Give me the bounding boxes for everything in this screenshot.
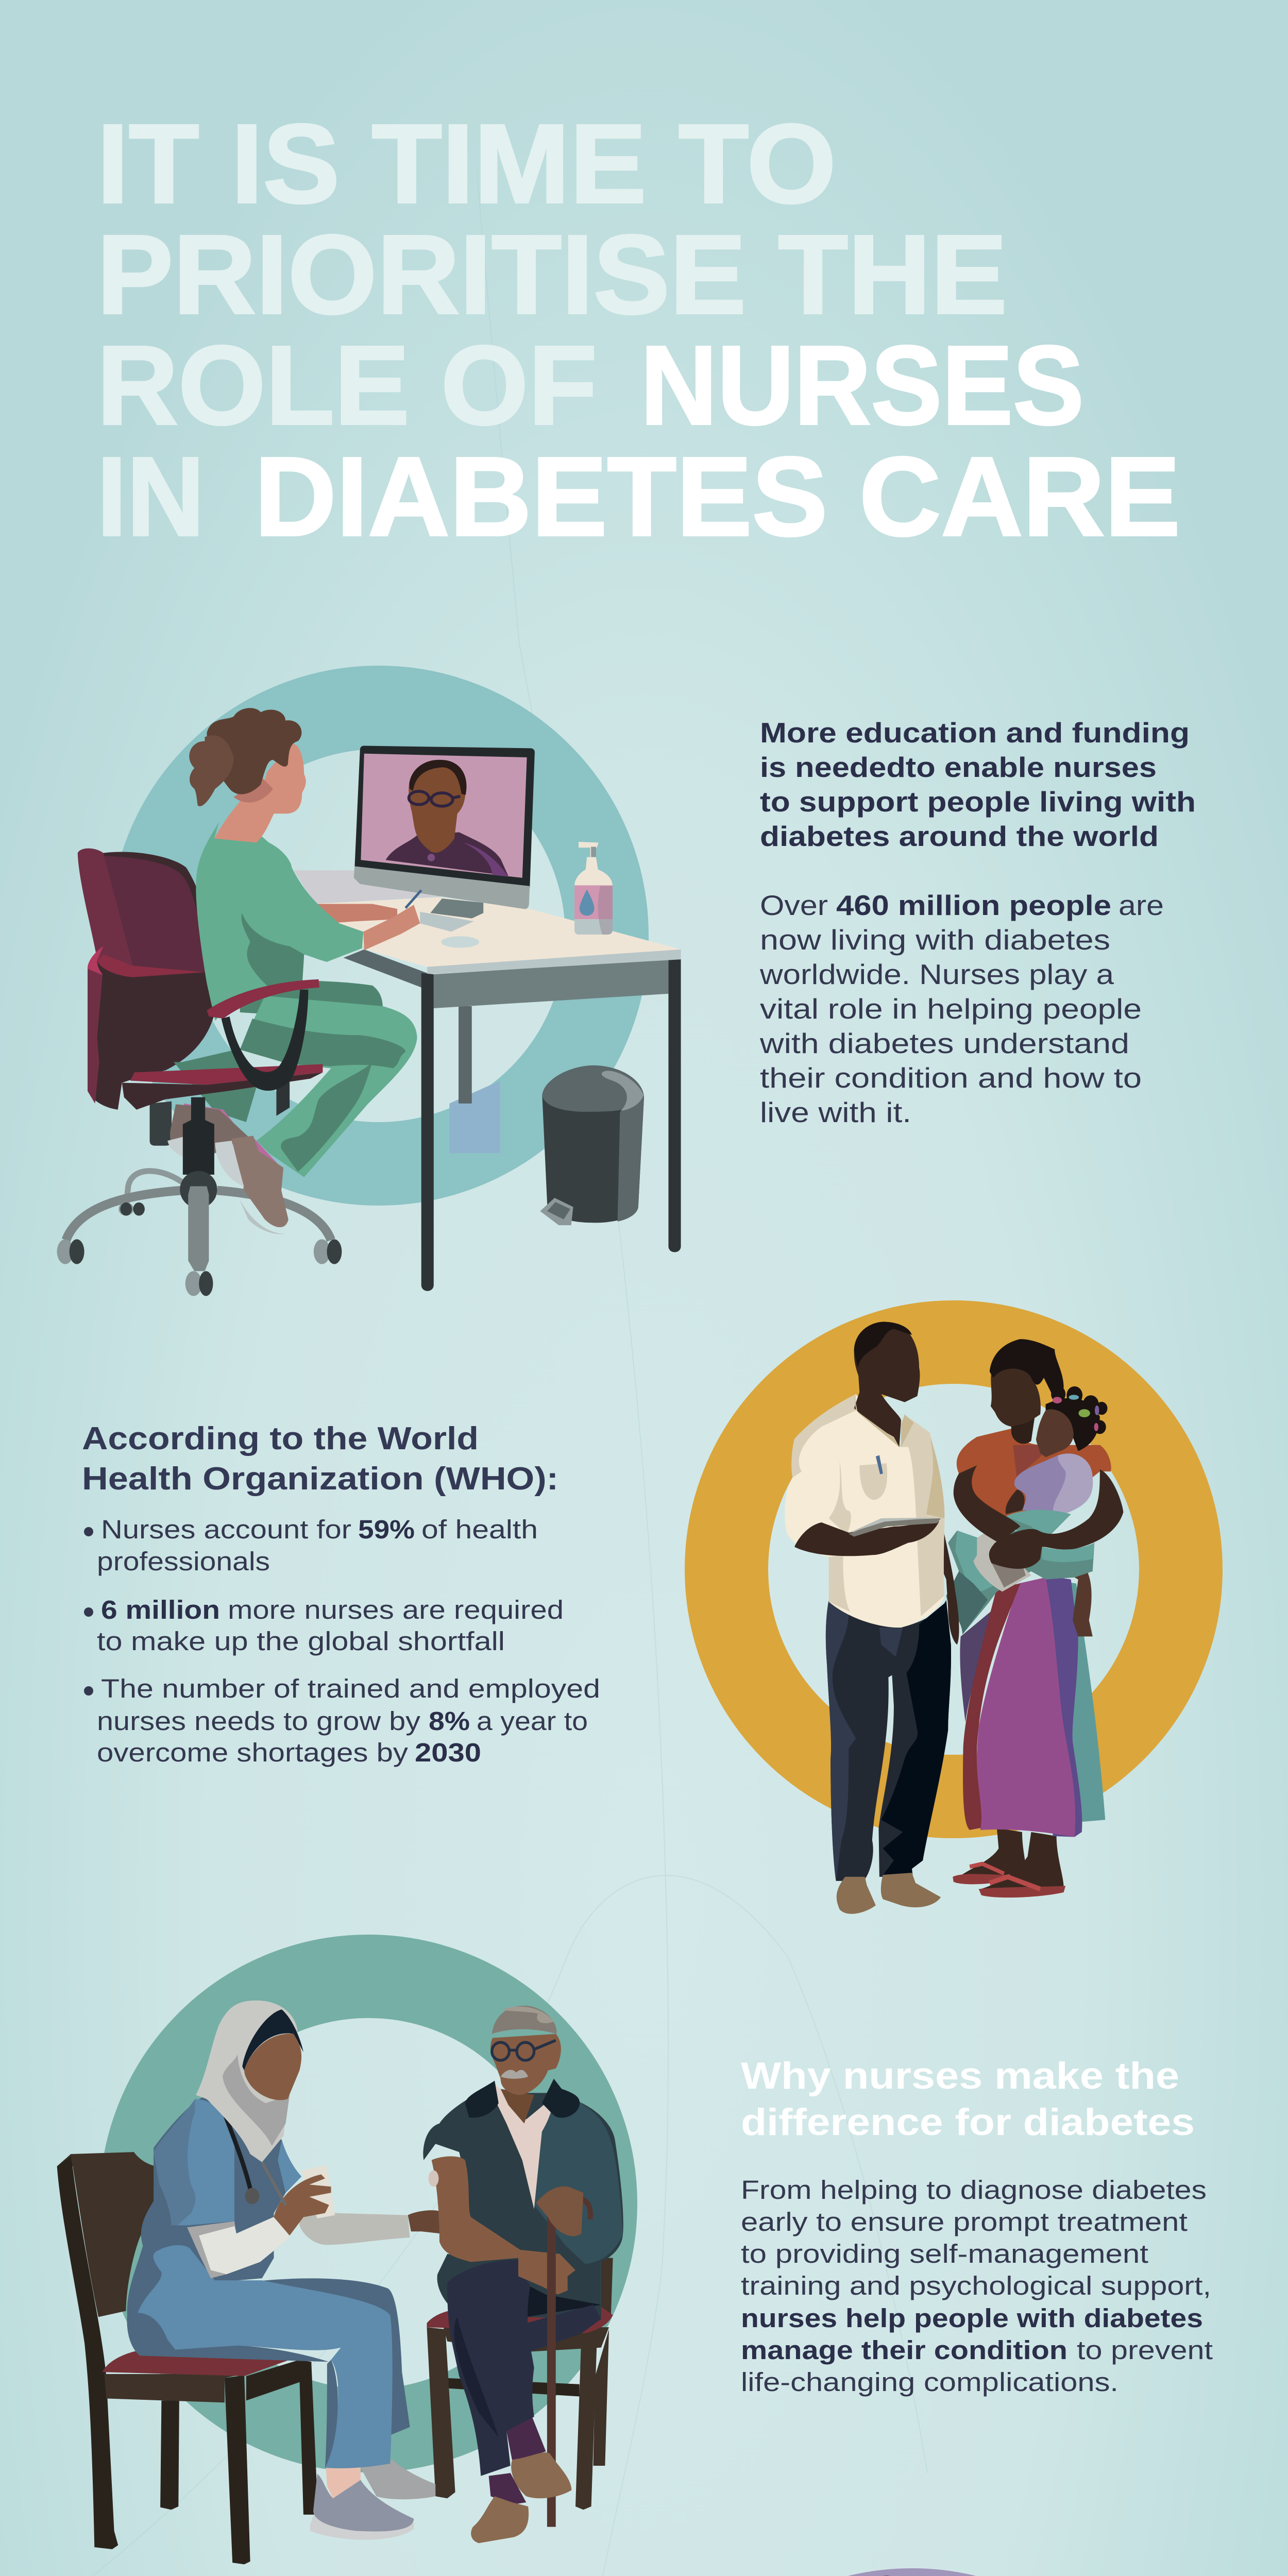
bullet list: professionals — [97, 1547, 270, 1576]
title: DIABETES CARE — [255, 434, 1180, 560]
heading — [760, 717, 1196, 852]
paragraph: their condition and how to — [760, 1062, 1142, 1094]
paragraph: life-changing complications. — [741, 2367, 1118, 2397]
bullet list: Nurses account for — [101, 1515, 351, 1544]
bullet list: nurses needs to grow by — [97, 1706, 421, 1736]
paragraph: manage their condition — [741, 2335, 1067, 2365]
bullet list: more nurses are required — [228, 1595, 564, 1624]
heading — [82, 1421, 558, 1497]
panel: nurse in hijab with elderly man illustration — [57, 1976, 623, 2564]
paragraph: to prevent — [1077, 2335, 1213, 2365]
heading: More education and funding — [760, 717, 1190, 749]
paragraph: to providing self-management — [741, 2239, 1148, 2268]
head and hair — [189, 708, 306, 843]
paragraph — [759, 889, 1164, 1128]
paragraph — [741, 2175, 1213, 2397]
heading: is neededto enable nurses — [760, 751, 1157, 783]
heading: According to the World — [82, 1421, 479, 1456]
bullet list: overcome shortages by — [97, 1738, 409, 1767]
paragraph: training and psychological support, — [741, 2271, 1211, 2300]
bullet list: 6 million — [101, 1595, 220, 1624]
woman and child — [946, 1339, 1123, 1897]
elderly man figure — [423, 2006, 623, 2543]
panel: nurse at video consultation illustration — [57, 707, 681, 1296]
title: IN — [97, 434, 205, 560]
bullet list: 2030 — [415, 1738, 481, 1767]
bullet list: 59% — [358, 1515, 415, 1544]
paragraph: 460 million people — [836, 889, 1111, 921]
panel: nurse testing patient in wheelchair illustration — [634, 2575, 1231, 2576]
paragraph: now living with diabetes — [760, 924, 1110, 956]
left chair back — [57, 2152, 318, 2549]
paragraph: worldwide. Nurses play a — [759, 958, 1114, 990]
front shoe — [215, 1136, 289, 1234]
icon: hand sanitiser bottle — [574, 842, 613, 935]
office chair — [78, 849, 290, 1146]
title: IT IS TIME TO — [97, 101, 836, 227]
heading: diabetes around the world — [760, 820, 1159, 852]
title: ROLE OF — [97, 323, 597, 448]
text block: why nurses make the difference — [741, 2055, 1213, 2397]
paragraph: Over — [760, 889, 828, 921]
heading: Health Organization (WHO): — [82, 1461, 558, 1497]
title: PRIORITISE THE — [97, 212, 1007, 337]
heading: to support people living with — [760, 786, 1196, 818]
left chair seat — [103, 2350, 311, 2564]
bullet list: of health — [421, 1515, 538, 1544]
right chair — [427, 2258, 613, 2510]
paragraph: are — [1118, 889, 1164, 921]
paragraph: early to ensure prompt treatment — [741, 2207, 1188, 2236]
chair seat, arm and base — [57, 979, 342, 1296]
back leg and shoe — [167, 1049, 257, 1157]
text block: more education and funding — [759, 717, 1196, 1128]
paragraph: vital role in helping people — [760, 993, 1142, 1025]
paragraph: with diabetes understand — [759, 1027, 1129, 1059]
heading: difference for diabetes — [741, 2102, 1195, 2143]
icon: rubbish bin — [540, 1065, 644, 1225]
nurse figure — [189, 708, 421, 1177]
computer monitor with video call — [354, 746, 535, 948]
male nurse figure — [634, 2575, 932, 2576]
bullet list: The number of trained and employed — [101, 1674, 600, 1703]
paragraph: From helping to diagnose diabetes — [741, 2175, 1207, 2205]
paragraph: live with it. — [760, 1096, 911, 1128]
nurse shoes — [310, 2460, 435, 2540]
heading — [741, 2055, 1195, 2143]
heading: Why nurses make the — [741, 2055, 1179, 2097]
panel: nurse with mother and child illustration — [726, 1322, 1181, 1914]
bullet list — [84, 1515, 600, 1767]
bullet list: 8% — [429, 1706, 470, 1736]
desk — [294, 870, 681, 1291]
nurse figure — [127, 2001, 440, 2468]
male nurse figure — [785, 1322, 959, 1914]
title — [97, 101, 1180, 560]
title: NURSES — [640, 323, 1084, 448]
bullet list: to make up the global shortfall — [97, 1626, 505, 1656]
text block: WHO statistics — [82, 1421, 600, 1767]
paragraph: nurses help people with diabetes — [741, 2303, 1203, 2333]
bullet list: a year to — [477, 1706, 588, 1736]
